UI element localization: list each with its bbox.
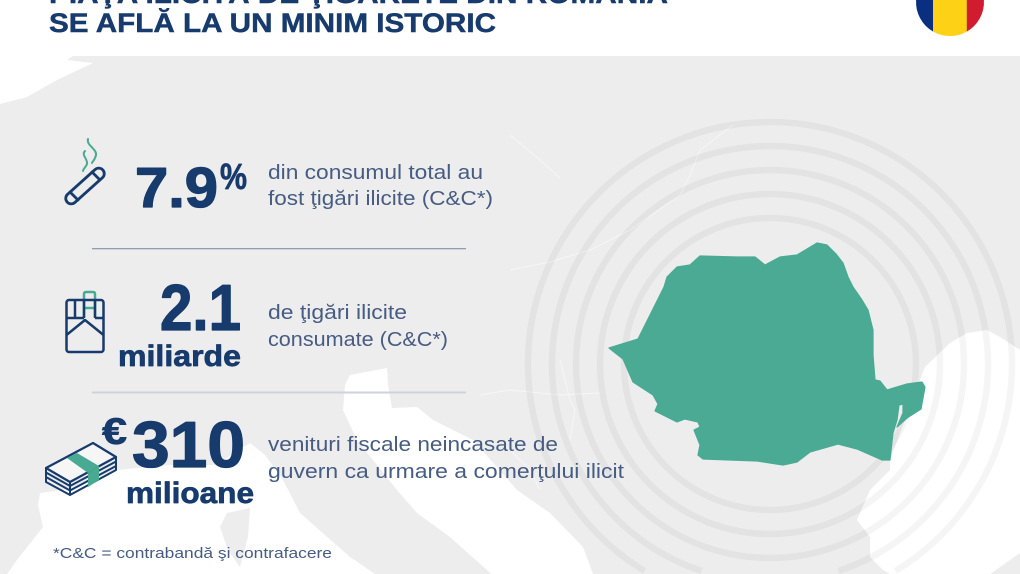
value: 2.1 (160, 271, 241, 344)
description: fost ţigări ilicite (C&C*) (268, 188, 493, 210)
value: 7.9 (135, 156, 218, 220)
unit: milioane (126, 477, 254, 510)
description: venituri fiscale neincasate de (268, 434, 558, 456)
icon: cigarette pack (66, 292, 104, 352)
description (268, 162, 493, 210)
footnote: *C&C = contrabandă şi contrafacere (53, 545, 332, 562)
description: guvern ca urmare a comerţului ilicit (268, 461, 624, 483)
currency sign: € (102, 411, 127, 452)
map: Romania (609, 243, 925, 465)
description: consumate (C&C*) (268, 329, 448, 351)
percent sign: % (220, 156, 247, 197)
value: 310 (132, 408, 245, 481)
concentric rings around Romania (528, 122, 1012, 571)
title (49, 0, 668, 38)
icon: banknote stack (46, 443, 116, 495)
divider (92, 392, 466, 394)
stat: 7.9% illicit consumption (63, 139, 493, 220)
description: din consumul total au (268, 162, 483, 184)
description: de ţigări ilicite (268, 302, 407, 324)
divider (92, 248, 466, 249)
stat: 2.1 billion cigarettes (66, 271, 448, 373)
icon: Romanian flag (916, 0, 984, 36)
title: SE AFLĂ LA UN MINIM ISTORIC (49, 8, 496, 38)
description (268, 302, 448, 351)
unit: miliarde (118, 340, 241, 373)
description (268, 434, 624, 483)
icon: cigarette (63, 139, 107, 206)
stat: 310 million euro (46, 408, 624, 510)
